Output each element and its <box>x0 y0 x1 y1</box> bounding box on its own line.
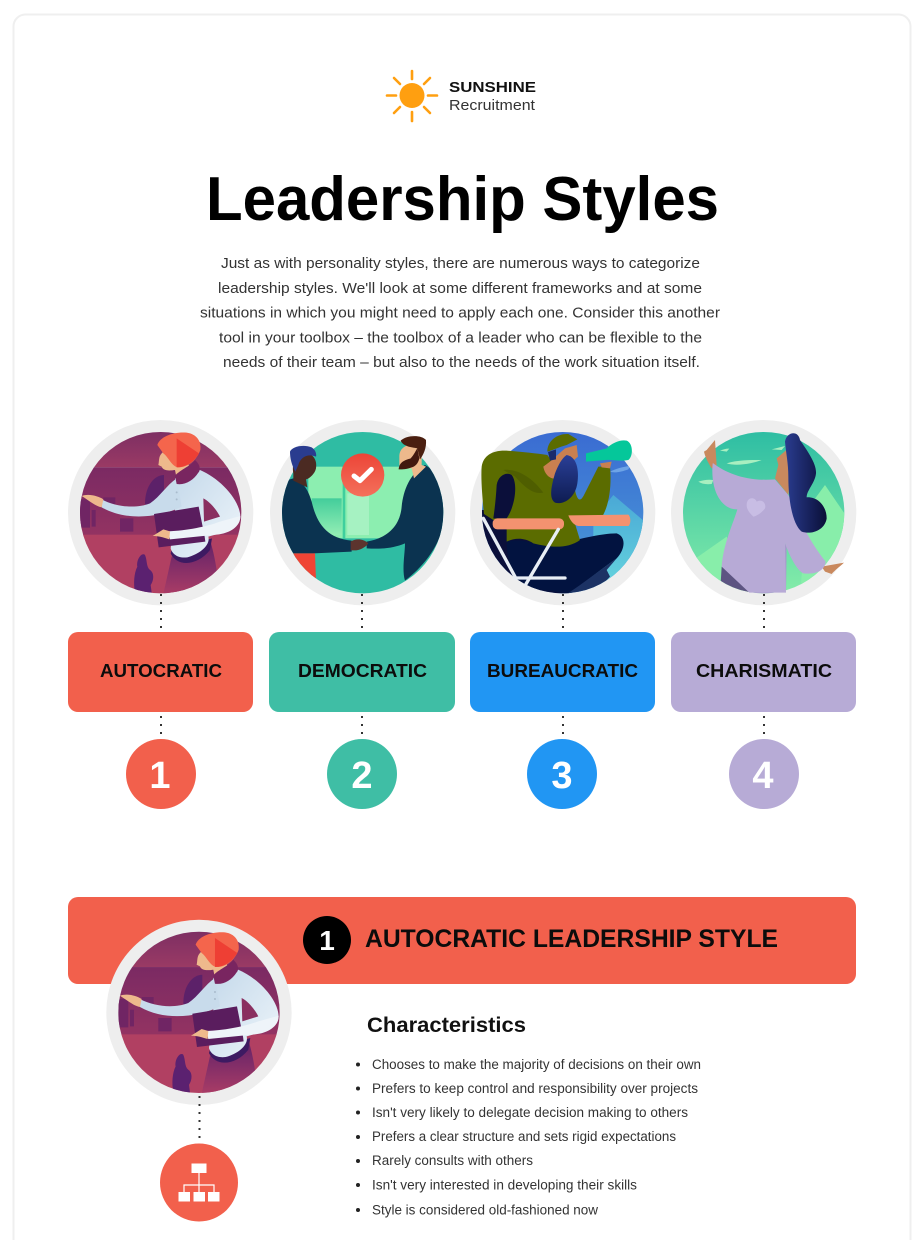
number 4 <box>729 739 799 809</box>
characteristics list: Chooses to make the majority of decisions on their own <box>372 1057 701 1072</box>
number 3 <box>527 739 597 809</box>
label: democratic <box>269 632 455 712</box>
characteristics list: Prefers to keep control and responsibility over projects <box>372 1081 698 1096</box>
label: autocratic <box>68 632 253 712</box>
number 1 <box>126 739 196 809</box>
number 4: 4 <box>752 755 774 797</box>
label: charismatic: CHARISMATIC <box>696 661 832 681</box>
section banner: autocratic leadership style <box>68 897 856 984</box>
characteristics list: Isn't very interested in developing their skills <box>372 1178 637 1192</box>
title: Leadership Styles <box>206 165 719 234</box>
icon: red check badge <box>341 453 384 497</box>
intro text: leadership styles. We'll look at some different frameworks and at some <box>218 280 702 297</box>
column: autocratic <box>68 420 253 809</box>
number 2 <box>327 739 397 809</box>
illustration: autocratic leader <box>68 420 253 605</box>
characteristics heading: Characteristics <box>367 1014 526 1037</box>
icon: sun <box>387 71 437 121</box>
label: bureaucratic <box>470 632 655 712</box>
characteristics list: Isn't very likely to delegate decision making to others <box>372 1105 688 1120</box>
label: charismatic <box>671 632 856 712</box>
illustration: woman with raised arms <box>671 420 856 605</box>
intro text: needs of their team – but also to the needs of the work situation itself. <box>223 354 700 371</box>
column: charismatic <box>671 420 856 809</box>
intro text: tool in your toolbox – the toolbox of a leader who can be flexible to the <box>219 330 702 346</box>
intro text <box>200 255 720 371</box>
characteristics list <box>356 1057 701 1218</box>
illustration: man with megaphone <box>470 420 655 605</box>
intro text: Just as with personality styles, there are numerous ways to categorize <box>221 255 700 272</box>
badge number 1: 1 <box>319 925 335 956</box>
illustration: autocratic leader large <box>106 920 292 1105</box>
banner heading: AUTOCRATIC LEADERSHIP STYLE <box>365 925 778 953</box>
intro text: situations in which you might need to apply each one. Consider this another <box>200 304 720 322</box>
characteristics list: Style is considered old-fashioned now <box>372 1202 598 1218</box>
illustration: handshake <box>270 420 455 605</box>
label: bureaucratic: BUREAUCRATIC <box>487 661 638 681</box>
icon: org chart <box>160 1144 238 1222</box>
logo text: Recruitment <box>449 98 535 114</box>
label: autocratic: AUTOCRATIC <box>100 661 222 681</box>
logo text: SUNSHINE <box>449 79 536 96</box>
column: bureaucratic <box>470 420 655 809</box>
column: democratic <box>269 420 455 809</box>
number 3: 3 <box>551 755 573 797</box>
characteristics list: Prefers a clear structure and sets rigid expectations <box>372 1129 676 1144</box>
badge number 1 <box>303 916 351 964</box>
number 1: 1 <box>149 755 171 797</box>
characteristics list: Rarely consults with others <box>372 1153 533 1168</box>
number 2: 2 <box>351 755 373 797</box>
logo text <box>449 79 536 114</box>
label: democratic: DEMOCRATIC <box>298 661 427 681</box>
logo <box>387 71 536 121</box>
